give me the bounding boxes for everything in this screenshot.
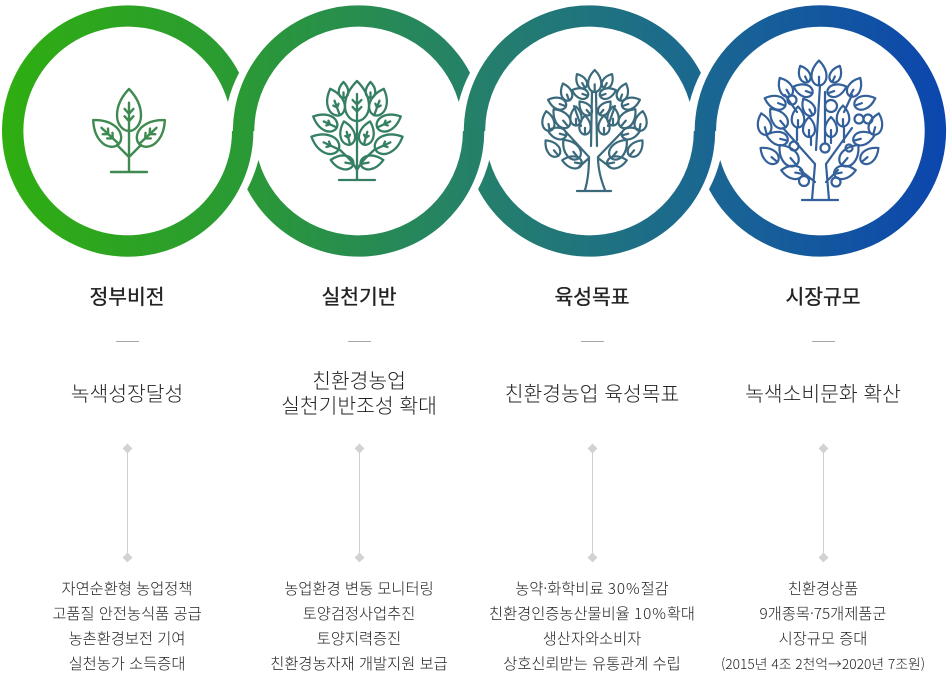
detail list (489, 577, 695, 674)
heading: 육성목표 (554, 280, 630, 310)
detail list (270, 577, 448, 674)
detail list: 농약·화학비료 30%절감 (515, 577, 669, 599)
detail list: 9개종목·75개제품군 (760, 602, 886, 624)
detail list: 상호신뢰받는 유통관계 수립 (503, 652, 681, 674)
heading: 정부비전 (89, 280, 165, 310)
ring chain: bottom of third circle joined to fourth circle (478, 5, 946, 257)
column: government vision (52, 280, 202, 674)
connector (588, 444, 598, 562)
heading: 실천기반 (321, 280, 397, 310)
detail list: 친환경상품 (788, 577, 858, 599)
divider (116, 341, 139, 342)
divider (581, 341, 604, 342)
column: practice foundation (270, 280, 448, 674)
subheading: 녹색성장달성 (71, 376, 183, 406)
icon: tree (540, 70, 649, 191)
connector (354, 444, 364, 562)
subheading: 친환경농업 육성목표 (505, 376, 679, 406)
heading: 시장규모 (785, 280, 861, 310)
detail list: 생산자와소비자 (543, 627, 641, 649)
column: development goals (489, 280, 695, 674)
icon: fruiting tree (755, 60, 885, 200)
detail list: 고품질 안전농식품 공급 (52, 602, 202, 624)
icon: seedling (86, 89, 172, 172)
column: market size (721, 280, 925, 673)
detail list: (2015년 4조 2천억→2020년 7조원) (721, 653, 925, 673)
detail list: 토양검정사업추진 (303, 602, 415, 624)
detail list: 토양지력증진 (317, 627, 401, 649)
detail list: 시장규모 증대 (779, 627, 867, 649)
detail list: 농업환경 변동 모니터링 (284, 577, 434, 599)
detail list (721, 577, 925, 673)
subheading: 실천기반조성 확대 (281, 388, 437, 418)
subheading: 친환경농업 (312, 364, 406, 394)
detail list: 친환경농자재 개발지원 보급 (270, 652, 448, 674)
ring chain: first circle joined to top of second circle (2, 5, 470, 257)
detail list: 친환경인증농산물비율 10%확대 (489, 602, 695, 624)
ring chain: bottom of second circle joined to top of third circle (247, 5, 701, 257)
detail list: 실천농가 소득증대 (69, 652, 185, 674)
detail list (52, 577, 202, 674)
subheading (281, 364, 437, 418)
divider (348, 341, 371, 342)
subheading: 녹색소비문화 확산 (745, 376, 901, 406)
connector (122, 444, 132, 562)
detail list: 자연순환형 농업정책 (62, 577, 192, 599)
detail list: 농촌환경보전 기여 (69, 627, 185, 649)
icon: young plant (308, 81, 406, 180)
connector (818, 444, 828, 562)
divider (812, 341, 835, 342)
